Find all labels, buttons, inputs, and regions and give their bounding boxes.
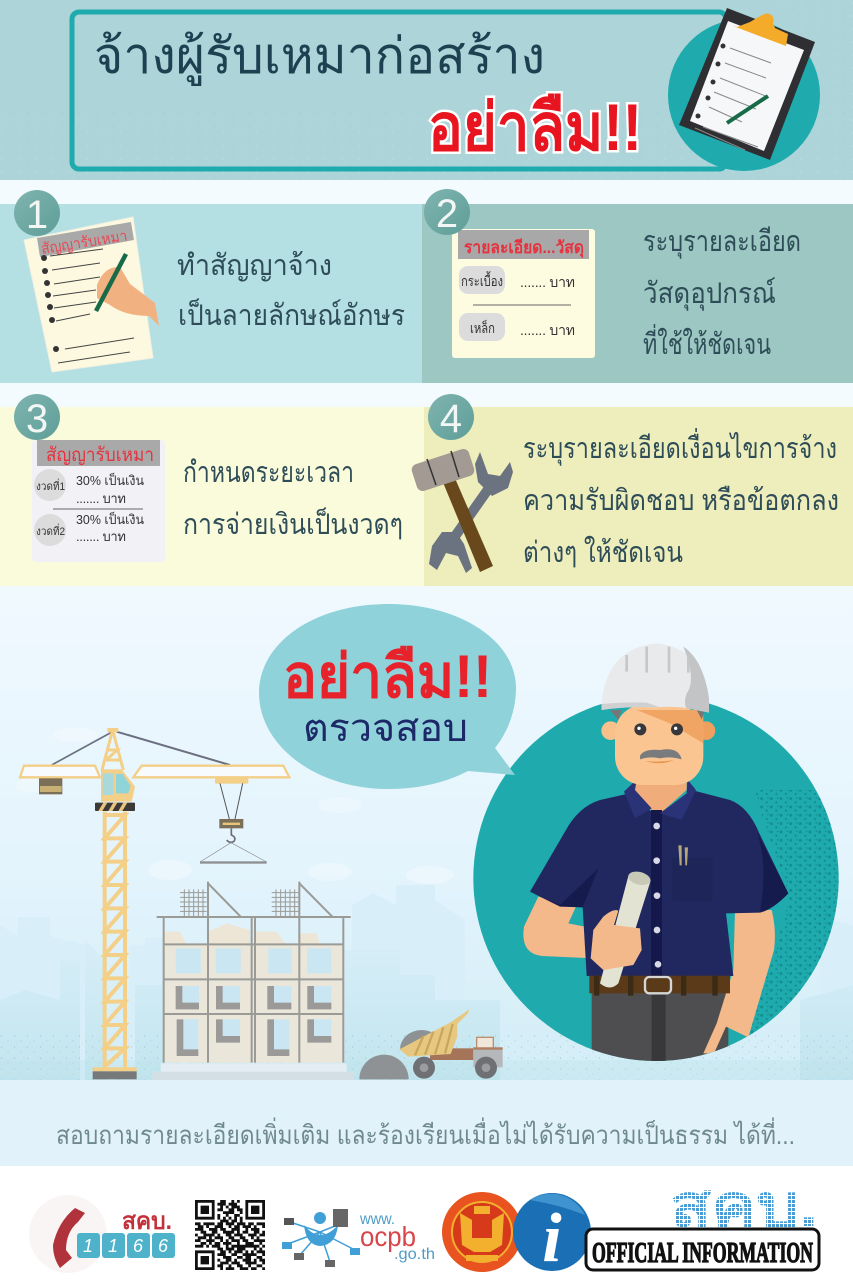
badge 2: 2: [436, 192, 458, 236]
badge 3: [14, 394, 60, 441]
logo: OCPB seal: [442, 1192, 522, 1272]
payment card: งวดที่2: [36, 523, 65, 538]
shirt: [530, 791, 788, 976]
materials card: รายละเอียด...วัสดุ: [464, 237, 584, 258]
step 4 text: [523, 428, 839, 569]
hand: [591, 910, 642, 970]
lower body: [592, 910, 775, 1063]
badge 2: [424, 189, 470, 236]
panel: step 3: [0, 407, 424, 586]
crane: [20, 728, 289, 1079]
badge 3: 3: [26, 397, 48, 441]
icon: hammer and wrench: [410, 447, 513, 573]
step 2 text: ที่ใช้ให้ชัดเจน: [643, 324, 771, 361]
construction scene: [0, 586, 853, 1080]
payment card: [32, 440, 165, 562]
payment card: งวดที่1: [36, 478, 65, 493]
rolled plan: [600, 869, 652, 987]
icon: clipboard: [668, 8, 820, 171]
panel: step 1: [0, 204, 422, 383]
badge 1: [14, 190, 60, 237]
icon: information: i: [542, 1200, 562, 1277]
bubble headline: อย่าลืม!!: [283, 643, 492, 710]
city skyline: [0, 885, 853, 1080]
building: [153, 882, 354, 1080]
logo: hotline 1166: 1: [108, 1236, 118, 1256]
speech bubble: [259, 604, 516, 789]
logo: hotline 1166: สคบ.: [122, 1208, 172, 1235]
step 2 text: [643, 226, 801, 361]
title: จ้างผู้รับเหมาก่อสร้าง: [94, 28, 545, 86]
step 4 text: ต่างๆ ให้ชัดเจน: [523, 535, 683, 569]
QR code: [195, 1201, 265, 1269]
official information label: สคบ.: [670, 1174, 818, 1239]
footer logos: [0, 1166, 853, 1280]
payment card: สัญญารับเหมา: [46, 445, 154, 466]
materials card: กระเบื้อง: [461, 271, 503, 289]
icon: information: [513, 1193, 591, 1277]
panel: step 2: [422, 204, 853, 383]
header banner: [0, 0, 853, 180]
badge 4: [428, 394, 474, 441]
payment card: ....... บาท: [76, 491, 126, 506]
official information label: [586, 1174, 819, 1270]
panel: step 4: [410, 407, 853, 586]
logo: hotline 1166: 6: [158, 1236, 169, 1256]
step 3 text: กำหนดระยะเวลา: [183, 457, 354, 489]
logo: hotline 1166: 1: [83, 1236, 93, 1256]
logo: hotline 1166: [29, 1195, 175, 1273]
left arm: [523, 897, 602, 958]
bubble subheading: ตรวจสอบ: [303, 707, 468, 750]
teal circle: [473, 696, 843, 1061]
logo: hotline 1166: 6: [133, 1236, 144, 1256]
clouds: [16, 728, 454, 884]
payment card: ....... บาท: [76, 529, 126, 544]
step 3 text: การจ่ายเงินเป็นงวดๆ: [183, 506, 403, 541]
number badges: [14, 189, 474, 441]
step 2 text: วัสดุอุปกรณ์: [643, 277, 776, 311]
neck: [633, 777, 687, 817]
badge 4: 4: [440, 397, 462, 441]
logo: ocpb website: ocpb: [360, 1221, 416, 1252]
materials card: [452, 229, 595, 358]
materials card: เหล็ก: [470, 319, 495, 336]
icon: contract with hand: [24, 217, 159, 372]
materials card: ....... บาท: [520, 322, 575, 338]
icon: contract with hand: สัญญารับเหมา: [40, 228, 129, 258]
step 1 text: ทำสัญญาจ้าง: [177, 250, 332, 282]
logo: ocpb website: [282, 1209, 435, 1267]
info band: [0, 1080, 853, 1166]
head: [601, 705, 715, 785]
logo: ocpb website: www.: [359, 1211, 395, 1228]
title frame: [72, 12, 726, 169]
hard hat: [602, 643, 709, 713]
ground speckle: [0, 1035, 853, 1080]
step 1 text: เป็นลายลักษณ์อักษร: [178, 297, 405, 332]
belt: [589, 976, 730, 993]
payment card: 30% เป็นเงิน: [76, 510, 144, 527]
payment card: 30% เป็นเงิน: [76, 471, 144, 488]
step 2 text: ระบุรายละเอียด: [643, 226, 801, 259]
dump truck and gravel: [359, 1009, 503, 1079]
materials card: ....... บาท: [520, 274, 575, 290]
logo: ocpb website: .go.th: [394, 1246, 435, 1263]
badge 1: 1: [26, 193, 48, 237]
step 3 text: [183, 457, 403, 541]
title highlight: อย่าลืม!!: [428, 90, 642, 164]
crane tower: [105, 812, 125, 1068]
step 1 text: [177, 250, 405, 332]
inspector character: [473, 643, 843, 1063]
